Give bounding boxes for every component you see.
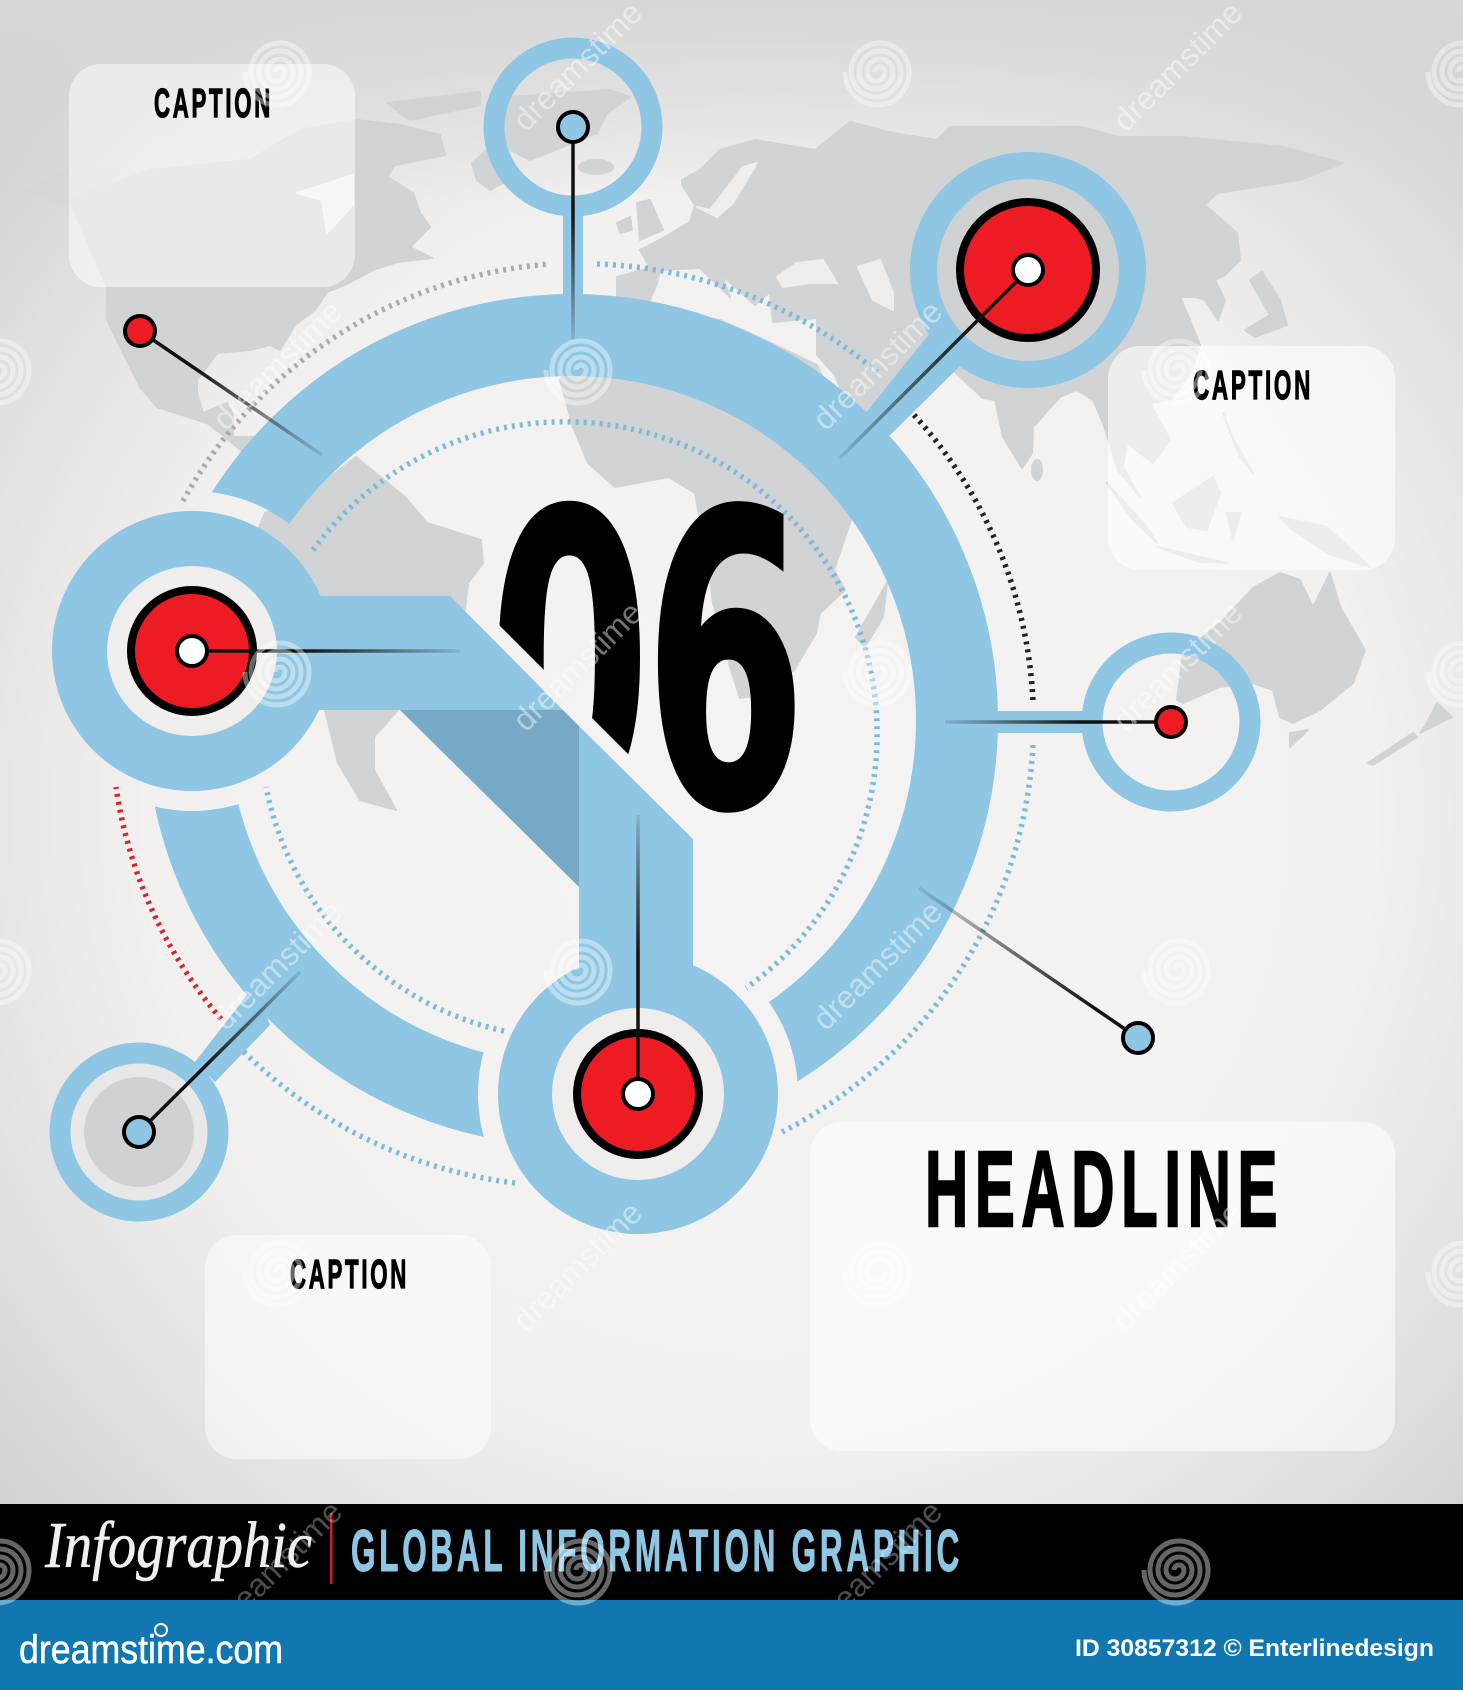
number 06: 6 bbox=[644, 425, 807, 903]
world map bbox=[25, 90, 1452, 810]
caption box: right bbox=[1108, 346, 1395, 570]
number 06 bbox=[500, 500, 795, 813]
caption box: bottom bbox=[205, 1235, 491, 1459]
node: right bbox=[945, 643, 1250, 801]
watermark text: dreamstime bbox=[805, 893, 949, 1037]
node: top right bbox=[840, 166, 1132, 458]
pointer: lower right bbox=[919, 888, 1153, 1053]
caption label: bottom: CAPTION bbox=[290, 1251, 409, 1297]
watermark text: dreamstime bbox=[805, 1493, 949, 1637]
main ring bbox=[187, 335, 957, 1105]
watermark text bbox=[205, 0, 1249, 1637]
credit logo: dreamstime.com bbox=[19, 1628, 283, 1672]
script title: Infographic bbox=[44, 1509, 312, 1582]
node: bottom bbox=[498, 815, 778, 1234]
credit id: ID 30857312 © Enterlinedesign bbox=[1075, 1635, 1434, 1662]
dotted arcs bbox=[116, 264, 1033, 1183]
node: left bbox=[52, 511, 460, 791]
watermark text: dreamstime bbox=[1105, 1194, 1249, 1338]
node: top bbox=[494, 48, 652, 340]
node: bottom left bbox=[60, 972, 300, 1211]
number 06: 0 bbox=[488, 425, 651, 903]
watermark text: dreamstime bbox=[505, 1194, 649, 1338]
footer divider bbox=[330, 1513, 332, 1584]
watermark text: dreamstime bbox=[805, 293, 949, 437]
watermark text: dreamstime bbox=[205, 293, 349, 437]
pointer: top left bbox=[125, 316, 322, 455]
central band bbox=[280, 596, 693, 990]
watermark text: dreamstime bbox=[505, 594, 649, 738]
watermark text: dreamstime bbox=[1105, 594, 1249, 738]
watermark text: dreamstime bbox=[205, 1493, 349, 1637]
caption label: right: CAPTION bbox=[1193, 362, 1313, 408]
footer black bar bbox=[0, 1504, 1463, 1600]
caption box: top left bbox=[69, 64, 355, 287]
caption label: top left: CAPTION bbox=[154, 80, 273, 126]
headline box bbox=[810, 1122, 1395, 1451]
credit bar bbox=[0, 1600, 1463, 1690]
watermark text: dreamstime bbox=[205, 893, 349, 1037]
